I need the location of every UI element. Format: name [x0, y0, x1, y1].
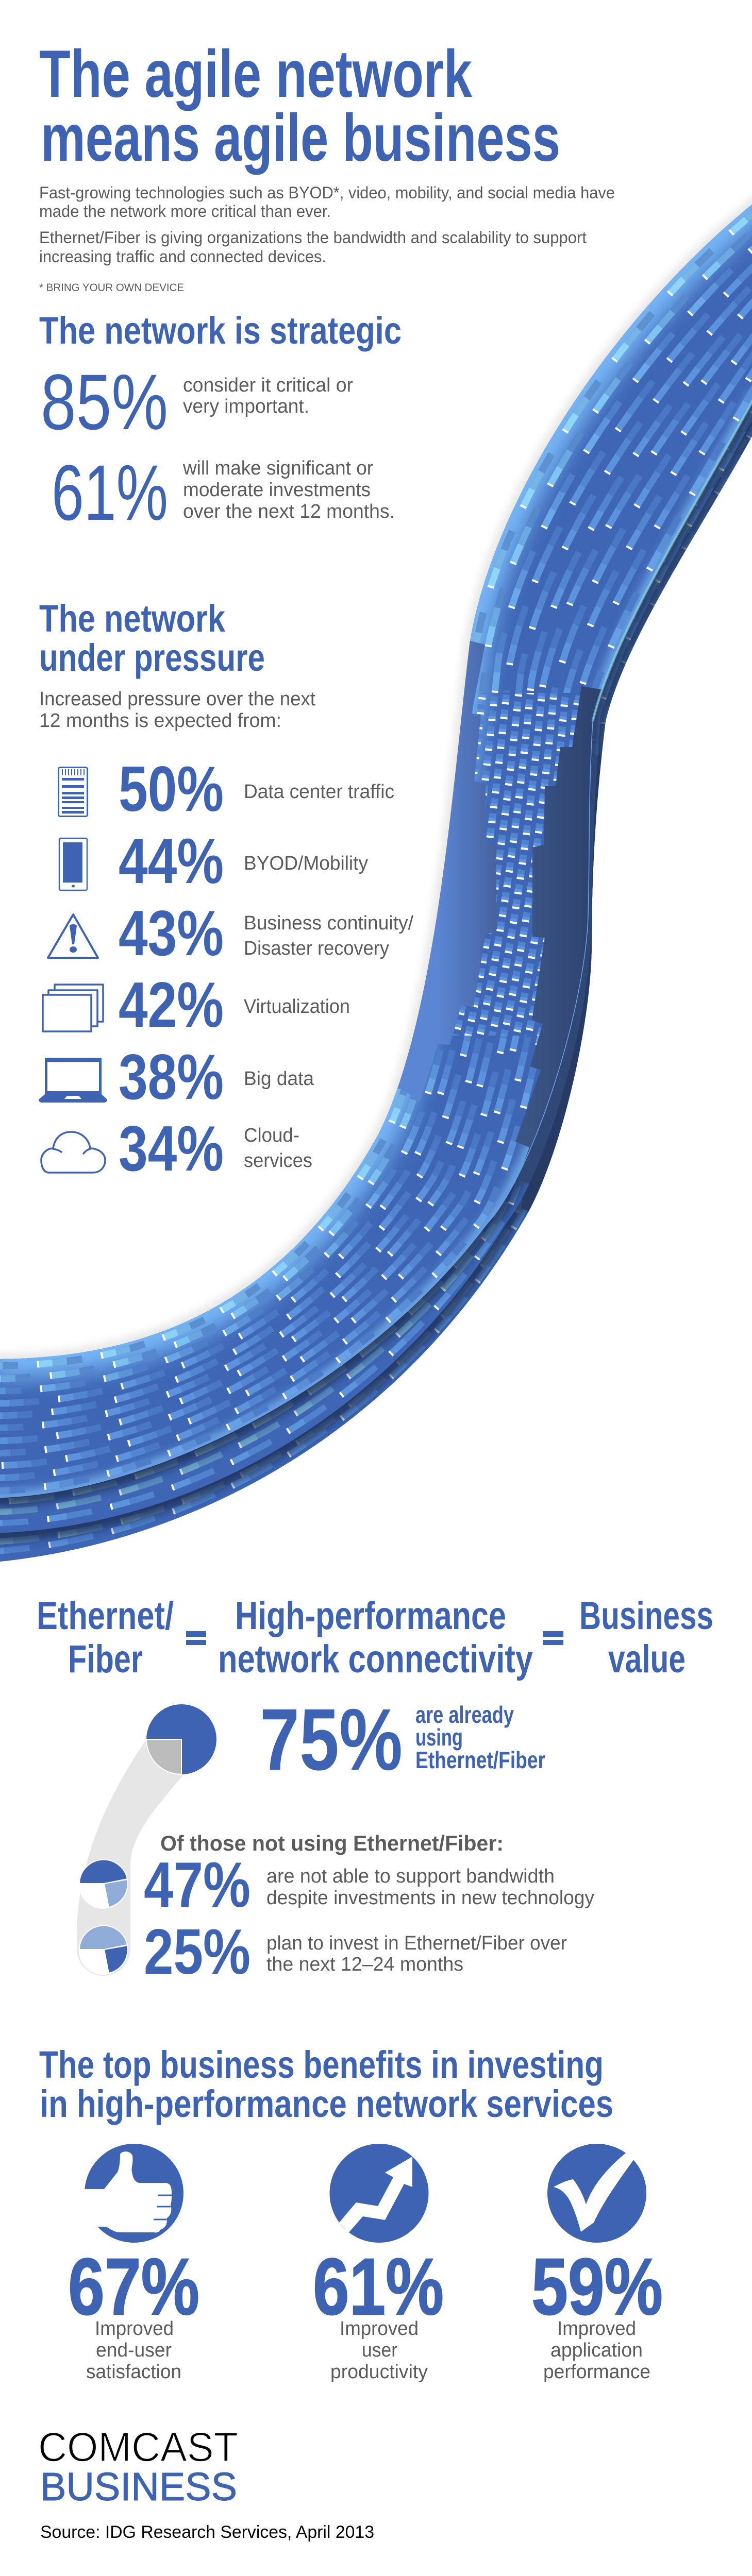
equation heading: High-performance: [235, 1594, 506, 1638]
stat: 61%: will make significant or: [182, 457, 373, 479]
logo: Comcast Business: COMCAST: [38, 2424, 238, 2470]
equation heading: Ethernet/: [37, 1594, 174, 1638]
row: cloud services: 34%: [119, 1113, 224, 1184]
stat: 47%: are not able to support bandwidth: [266, 1866, 555, 1887]
stat: 61%: [52, 449, 395, 537]
pressure intro text: 12 months is expected from:: [39, 710, 281, 732]
benefit: application performance: Improved: [557, 2318, 636, 2340]
row: business continuity: Business continuity/: [244, 912, 413, 934]
heading: the network under pressure: The network: [39, 597, 226, 640]
row: big data: [39, 1042, 314, 1113]
stat: 85%: [41, 358, 353, 446]
title: [39, 36, 560, 175]
benefit: productivity: 61%: [313, 2242, 444, 2332]
intro text block: increasing traffic and connected devices.: [39, 247, 326, 266]
row: business continuity: 43%: [119, 898, 224, 969]
row: virtualization: Virtualization: [244, 996, 350, 1018]
benefit: satisfaction: 67%: [68, 2242, 199, 2332]
benefit: productivity: user: [362, 2340, 397, 2361]
title: means agile business: [41, 100, 560, 175]
stat: 25%: 25%: [144, 1917, 250, 1988]
icon: server: [59, 768, 88, 816]
benefit: application performance: 59%: [531, 2242, 663, 2332]
stat: 85%: 85%: [41, 358, 168, 446]
benefit: application performance: [531, 2144, 663, 2383]
row: virtualization: 42%: [119, 970, 224, 1041]
row: BYOD/Mobility: BYOD/Mobility: [244, 853, 368, 874]
stat: 75%: are already: [415, 1701, 514, 1728]
icon: check mark: [547, 2144, 646, 2243]
equation heading: Business: [579, 1594, 713, 1638]
row: business continuity: [48, 898, 413, 969]
source: Source: IDG Research Services, April 2013: [40, 2522, 374, 2542]
row: BYOD/Mobility: [59, 826, 368, 897]
heading: top business benefits: in high-performance network services: [40, 2082, 613, 2125]
stat: 47%: [144, 1850, 594, 1921]
row: data center traffic: [59, 754, 394, 825]
subheading: of those not using: Of those not using Ethernet/Fiber:: [160, 1831, 504, 1855]
stat: 47%: despite investments in new technology: [266, 1887, 594, 1909]
pie chart: 75%: [146, 1704, 216, 1774]
benefit: satisfaction: [68, 2144, 199, 2383]
icon: laptop: [39, 1058, 107, 1103]
equation heading: [37, 1594, 713, 1681]
stat: 75%: [260, 1691, 545, 1789]
benefit: application performance: application: [550, 2340, 643, 2361]
stat: 85%: consider it critical or: [183, 375, 353, 396]
benefit: satisfaction: satisfaction: [86, 2361, 181, 2383]
benefit: productivity: [313, 2144, 444, 2383]
icon: warning triangle: [48, 914, 98, 958]
heading: the network under pressure: [39, 597, 265, 679]
stat: 61%: moderate investments: [183, 479, 371, 501]
benefit: satisfaction: Improved: [95, 2318, 174, 2340]
icon: rising arrow: [330, 2144, 429, 2243]
logo: Comcast Business: [38, 2424, 238, 2509]
stat: 61%: 61%: [52, 449, 168, 537]
icon: stacked windows: [43, 985, 103, 1031]
heading: top business benefits: [39, 2043, 613, 2125]
row: business continuity: Disaster recovery: [244, 938, 389, 959]
stat: 61%: over the next 12 months.: [183, 501, 395, 522]
row: BYOD/Mobility: 44%: [119, 826, 224, 897]
row: big data: Big data: [244, 1068, 314, 1090]
stat: 25%: the next 12–24 months: [266, 1954, 463, 1975]
intro text block: Ethernet/Fiber is giving organizations the bandwidth and scalability to support: [39, 228, 587, 247]
pressure intro text: [39, 688, 315, 732]
equation heading: network connectivity: [218, 1637, 533, 1681]
icon: cloud: [41, 1132, 105, 1173]
intro text block: Fast-growing technologies such as BYOD*, video, mobility, and social media have: [39, 183, 615, 202]
row: virtualization: [43, 970, 350, 1041]
stat: 75%: using: [415, 1724, 463, 1751]
logo: Comcast Business: BUSINESS: [40, 2465, 237, 2509]
benefit: application performance: performance: [543, 2361, 650, 2383]
benefit: productivity: Improved: [340, 2318, 419, 2340]
title: The agile network: [39, 36, 473, 111]
stat: 75%: 75%: [260, 1691, 403, 1789]
benefit: satisfaction: end-user: [96, 2340, 172, 2361]
benefit: productivity: productivity: [330, 2361, 428, 2383]
intro text block: made the network more critical than ever.: [39, 202, 331, 221]
stat: 75%: Ethernet/Fiber: [415, 1747, 545, 1773]
stat: 47%: 47%: [144, 1850, 250, 1921]
footnote: * BRING YOUR OWN DEVICE: [39, 282, 184, 294]
pie chart: 25%: [78, 1925, 128, 1975]
equation heading: Fiber: [68, 1637, 143, 1681]
pie chart: 47%: [78, 1859, 128, 1909]
heading: the network is strategic: The network is strategic: [39, 309, 402, 352]
heading: top business benefits: The top business benefits in investing: [39, 2043, 604, 2086]
row: cloud services: services: [244, 1150, 312, 1172]
row: cloud services: [41, 1113, 312, 1184]
connector band: [77, 1739, 183, 1976]
stat: 85%: very important.: [183, 396, 309, 417]
icon: thumbs up: [77, 2144, 183, 2243]
row: data center traffic: 50%: [119, 754, 224, 825]
equation heading: value: [608, 1637, 686, 1681]
row: cloud services: Cloud-: [244, 1125, 299, 1146]
stat: 25%: plan to invest in Ethernet/Fiber over: [266, 1933, 567, 1954]
pressure intro text: Increased pressure over the next: [39, 688, 315, 710]
decorative ribbon of fiber streaks: [0, 196, 752, 1563]
row: data center traffic: Data center traffic: [244, 781, 394, 803]
heading: the network under pressure: under pressure: [39, 636, 265, 679]
stat: 25%: [144, 1917, 567, 1988]
row: big data: 38%: [119, 1042, 224, 1113]
intro text block: [39, 183, 615, 266]
icon: tablet: [59, 838, 87, 890]
